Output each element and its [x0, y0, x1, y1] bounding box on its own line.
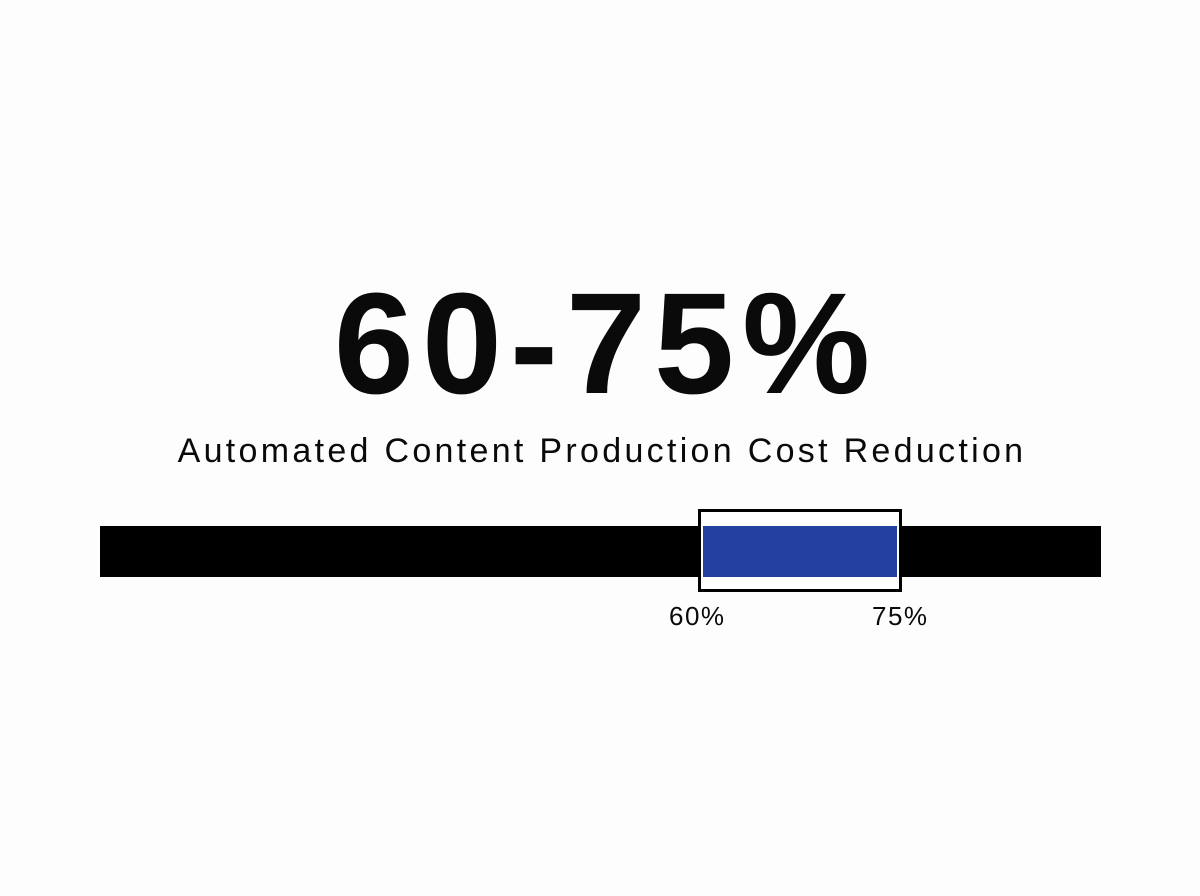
label: 60%: 60%	[669, 601, 726, 631]
title: big number: 60-75%	[334, 263, 878, 424]
range bar chart	[100, 509, 1101, 631]
subtitle: Automated Content Production Cost Reduction	[178, 432, 1026, 470]
bar: full range track	[100, 526, 1101, 577]
highlight box: 60-75%	[698, 509, 902, 592]
label: 75%: 75%	[872, 601, 929, 631]
